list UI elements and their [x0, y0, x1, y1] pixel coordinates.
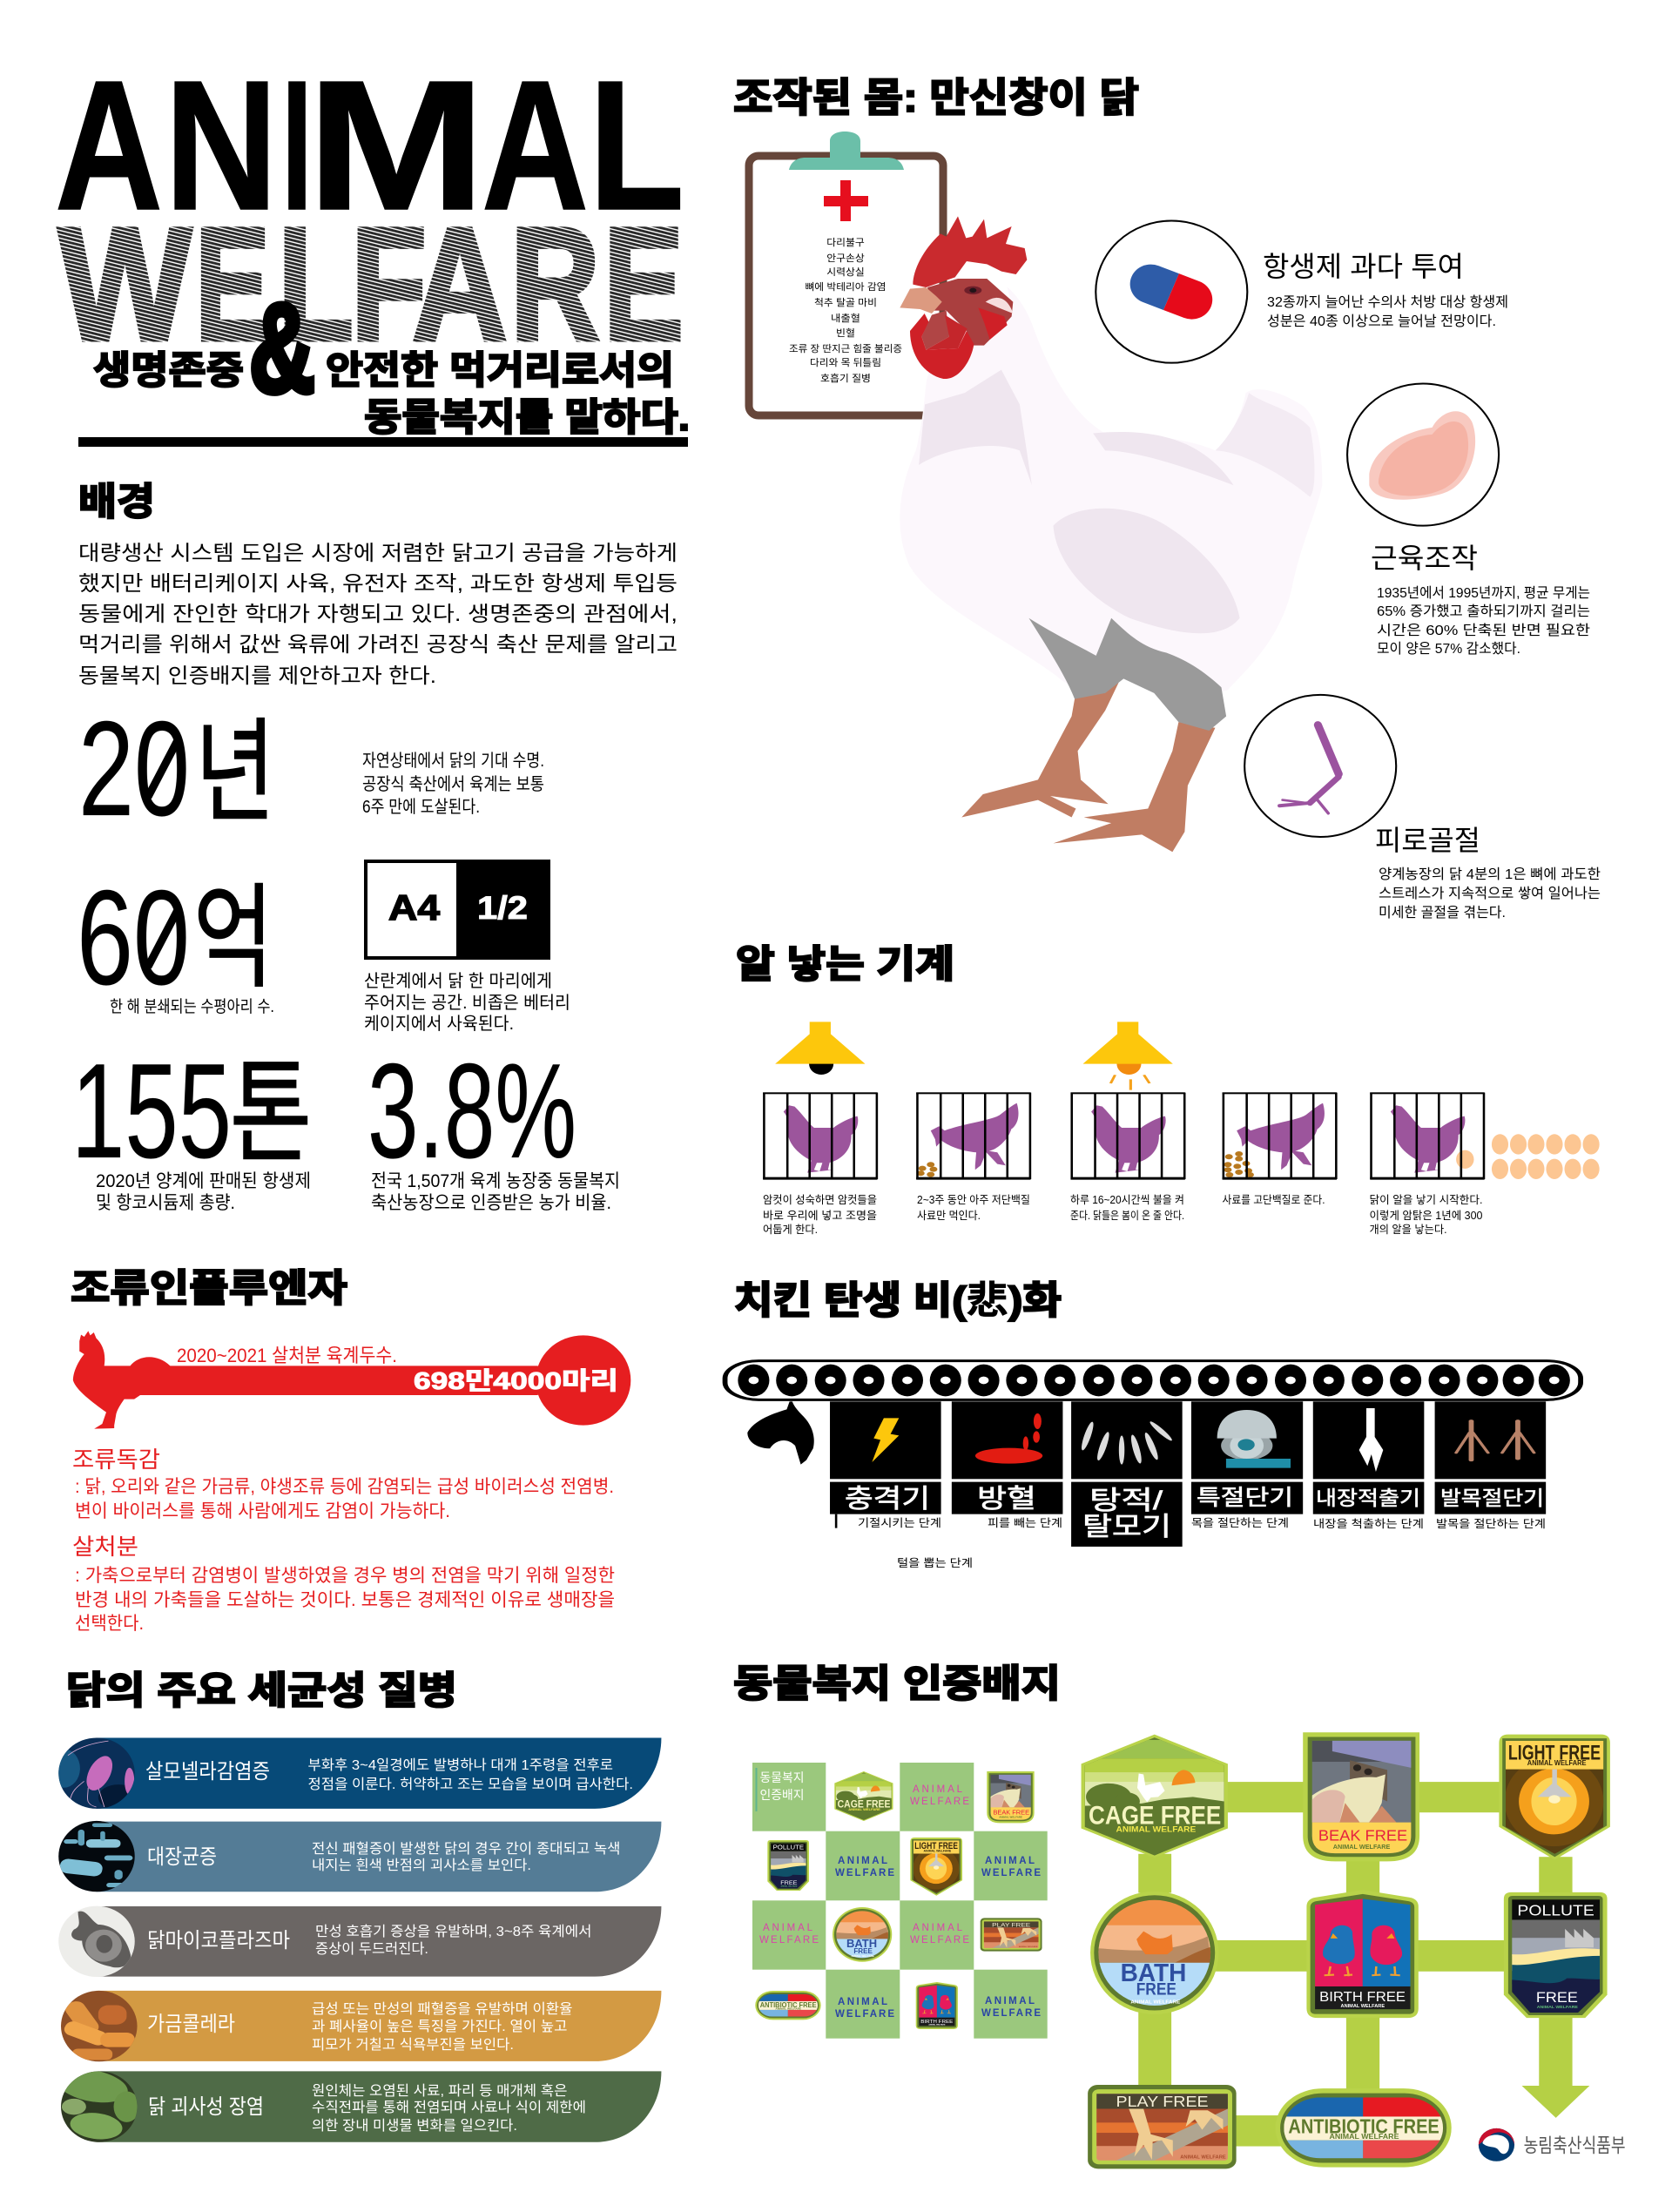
badge grid [752, 1763, 1048, 2039]
badge: bath free: FREE [1136, 1980, 1176, 1999]
cage 1 [763, 1092, 878, 1180]
arrow [1521, 2017, 1589, 2118]
mini badge: birth free [916, 1982, 958, 2029]
badge: beak free [1303, 1732, 1419, 1861]
disease 1: salmonella: 살모넬라감염증 [145, 1760, 270, 1784]
stat: A4 half space: A4 [388, 887, 440, 927]
pink wordmarks: ANIMAL [913, 1784, 963, 1795]
blue wordmarks: WELFARE [981, 2008, 1041, 2019]
badge: light free: LIGHT FREE [1508, 1741, 1601, 1764]
heading: processing: 치킨 탄생 비( 悲)화 [734, 1279, 1062, 1322]
title: WELFARE hatched: F [351, 195, 427, 374]
badge: pollute free: POLLUTE [1517, 1903, 1594, 1919]
panel: chicken processing [725, 1279, 1581, 1569]
station label 5: 내장을 척출하는 단계 [1313, 1518, 1424, 1530]
disease 2: colibacillosis: 대장균증 [147, 1845, 217, 1869]
badge: cage free: ANIMAL WELFARE [1116, 1825, 1197, 1834]
disease 4: fowl cholera [147, 2001, 573, 2053]
rooster head [900, 216, 1027, 379]
heading: avian influenza: 조류인플루엔자 [71, 1267, 347, 1310]
title: WELFARE hatched: R [510, 195, 600, 374]
station label 2: 방혈 [977, 1485, 1036, 1514]
stat: 3.8 percent: 축산농장으로 인증받은 농가 비율. [371, 1193, 611, 1213]
caption: step 3: 준다. 닭들은 봄이 온 줄 안다. [1070, 1210, 1184, 1222]
stat: 6 billion: 억 [193, 874, 273, 1001]
disease 4: fowl cholera: 급성 또는 만성의 패혈증을 유발하며 이환율 [312, 2001, 573, 2017]
grid caption: 동물복지 [759, 1770, 805, 1784]
caption: step 5: 닭이 알을 낳기 시작한다. [1369, 1194, 1482, 1206]
panel: manipulated body [733, 75, 1601, 921]
definition: culling: 선택한다. [75, 1614, 144, 1634]
subtitle: 동물복지를 말하다. [364, 396, 690, 439]
badge: antibiotic free: ANTIBIOTIC FREE [1288, 2116, 1439, 2138]
stat: 155 tons: 톤 [230, 1049, 312, 1177]
subtitle: 안전한 먹거리로서의 [326, 349, 674, 392]
title block [55, 42, 690, 447]
disease 1: salmonella: 부화후 3~4일경에도 발병하나 대개 1주령을 전후로 [308, 1757, 613, 1773]
caption: step 4: 사료를 고단백질로 준다. [1223, 1194, 1325, 1206]
badge: light free: ANIMAL WELFARE [1527, 1759, 1587, 1767]
heading: egg machine: 알 낳는 기계 [736, 943, 954, 986]
title: WELFARE hatched: E [603, 195, 684, 374]
symptoms list: 다리불구 [826, 237, 865, 248]
stat: A4 half space: 주어지는 공간. 비좁은 베터리 [364, 993, 570, 1013]
title: WELFARE hatched: L [278, 195, 354, 374]
definition: bird flu: : 닭, 오리와 같은 가금류, 야생조류 등에 감염되는 급성 바이러스성 전염병. [75, 1477, 614, 1497]
symptoms list: 뼈에 박테리아 감염 [805, 281, 887, 293]
disease bands and photos [48, 1737, 661, 2144]
pink wordmarks [759, 1784, 969, 1946]
photo: necrotic enteritis [61, 2071, 138, 2142]
station label 2: 피를 빼는 단계 [988, 1517, 1062, 1529]
badge: bath free: BATH [1121, 1959, 1186, 1986]
badge: beak free: ANIMAL WELFARE [1333, 1844, 1390, 1851]
stat: 20 years: 공장식 축산에서 육계는 보통 [362, 774, 544, 794]
title: WELFARE hatched: W [58, 195, 192, 374]
blue wordmarks: ANIMAL [838, 1856, 887, 1866]
station label 4: 목을 절단하는 단계 [1191, 1517, 1289, 1529]
station label 3: 탕적/ [1089, 1487, 1163, 1515]
disease 5: necrotic enteritis: 수직전파를 통해 전염되며 사료나 식이 제한에 [312, 2100, 586, 2115]
conveyor belt [725, 1361, 1581, 1399]
background paragraph: 동물복지 인증배지를 제안하고자 한다. [78, 664, 436, 688]
disease 1: salmonella: 정점을 이룬다. 허약하고 조는 모습을 보이며 급사한다. [308, 1777, 633, 1792]
badge: pollute free: ANIMAL WELFARE [1537, 2006, 1578, 2010]
pink wordmarks: ANIMAL [913, 1923, 963, 1933]
icon: chicken feet [1456, 1421, 1534, 1460]
caption: step 1 [763, 1194, 877, 1236]
title: ANIMAL [55, 42, 684, 248]
processing line illustration [725, 1361, 1581, 1547]
symptoms list: 다리와 목 뒤틀림 [810, 357, 881, 368]
stat: A4 half space: 1/2 [477, 890, 528, 926]
pink wordmarks: WELFARE [910, 1935, 969, 1946]
bar caption: 2020~2021 살처분 육계두수. [177, 1345, 397, 1366]
badge: birth free: ANIMAL WELFARE [1341, 2004, 1385, 2009]
mini badge: bath free [833, 1907, 892, 1962]
title: WELFARE hatched: E [195, 195, 270, 374]
station label 6: 발목절단기 [1440, 1487, 1544, 1509]
cage 5 [1370, 1092, 1485, 1180]
pink wordmarks: WELFARE [759, 1935, 819, 1946]
title: WELFARE hatched: A [412, 195, 508, 374]
subtitle [93, 349, 690, 439]
badge: antibiotic free: ANIMAL WELFARE [1330, 2133, 1399, 2141]
background paragraph: 동물에게 잔인한 학대가 자행되고 있다. 생명존중의 관점에서, [78, 603, 678, 626]
stat: A4 half space [364, 860, 570, 1034]
caption: step 2: 사료만 먹인다. [917, 1210, 981, 1222]
icon: hanging chicken [747, 1401, 814, 1465]
symptoms list [789, 237, 902, 384]
subtitle: 생명존중 [93, 349, 244, 392]
disease 5: necrotic enteritis: 원인체는 오염된 사료, 파리 등 매개체 혹은 [312, 2083, 568, 2099]
stat: 155 tons: 및 항코시듐제 총량. [96, 1193, 235, 1213]
disease 2: colibacillosis: 내지는 흰색 반점의 괴사소를 보인다. [312, 1858, 531, 1873]
mini badge: cage free [834, 1771, 893, 1821]
grid cells [752, 1763, 1048, 2039]
badge: beak free: BEAK FREE [1318, 1828, 1407, 1844]
disease 4: fowl cholera: 과 폐사율이 높은 특징을 가진다. 열이 높고 [312, 2019, 568, 2034]
grid caption [756, 1768, 805, 1811]
station label 5 [1313, 1487, 1424, 1530]
photo: E. coli [56, 1820, 137, 1894]
caption: step 3 [1070, 1194, 1184, 1222]
station label 1 [845, 1485, 941, 1529]
stat: 155 tons: 2020년 양계에 판매된 항생제 [96, 1171, 311, 1191]
caption: step 1: 바로 우리에 넣고 조명을 [763, 1210, 877, 1222]
symptoms list: 조류 장 딴지근 힘줄 불리증 [789, 343, 902, 354]
caption: step 1: 암컷이 성숙하면 암컷들을 [763, 1194, 877, 1206]
panel: welfare certification badges [733, 1662, 1626, 2168]
title: ANIMAL: N [165, 42, 278, 248]
stat: 155 tons: 155 [71, 1035, 232, 1186]
definition: bird flu: 조류독감 [72, 1447, 160, 1473]
pink wordmarks: ANIMAL [763, 1923, 813, 1933]
blue wordmarks: WELFARE [835, 2009, 894, 2020]
cage 4 [1223, 1092, 1337, 1180]
stat: A4 half space: 케이지에서 사육된다. [364, 1014, 514, 1034]
heading: background: 배경 [78, 481, 155, 523]
symptoms list: 안구손상 [826, 253, 865, 264]
definition: culling: 반경 내의 가축들을 도살하는 것이다. 보통은 경제적인 이유로 생매장을 [75, 1590, 615, 1610]
callout: muscle manipulation: 1935년에서 1995년까지, 평균 무게는 [1377, 585, 1590, 601]
callout: muscle manipulation [1371, 543, 1590, 657]
badge: birth free [1306, 1890, 1419, 2018]
icon: blood [975, 1413, 1042, 1464]
disease 2: colibacillosis [147, 1841, 620, 1873]
ampersand: & [249, 277, 315, 419]
icon: muscle [1347, 384, 1499, 526]
symptoms list: 척추 탈골 마비 [814, 297, 877, 308]
icon: lit lamp [1082, 1022, 1173, 1090]
stat: A4 half space: 산란계에서 닭 한 마리에게 [364, 971, 552, 991]
title: ANIMAL: I [281, 42, 313, 248]
logo: ministry [1479, 2128, 1626, 2161]
heading: badges: 동물복지 인증배지 [733, 1662, 1061, 1705]
connector paths [1138, 1782, 1573, 2147]
station label 3 [897, 1487, 1171, 1569]
station label 6 [1436, 1487, 1546, 1530]
definition: bird flu [72, 1447, 614, 1521]
cage 3 [1070, 1092, 1185, 1180]
station label 5: 내장적출기 [1316, 1487, 1420, 1509]
disease 1: salmonella [145, 1757, 633, 1792]
callout: fatigue fracture: 양계농장의 닭 4분의 1은 뼈에 과도한 [1379, 867, 1601, 882]
blue wordmarks: ANIMAL [985, 1856, 1035, 1866]
icon: eviscerator [1359, 1408, 1383, 1472]
pink wordmarks: WELFARE [910, 1797, 969, 1807]
stat: 6 billion: 한 해 분쇄되는 수평아리 수. [110, 997, 274, 1016]
icon: antibiotic pill [1096, 221, 1247, 363]
stat: 20 years: 년 [195, 709, 275, 836]
symptoms list: 호흡기 질병 [820, 372, 871, 384]
egg machine illustration [763, 1022, 1600, 1180]
blue wordmarks: ANIMAL [838, 1997, 887, 2007]
badge flow chart [1082, 1732, 1626, 2168]
stat: 20 years: 20 [78, 693, 190, 844]
illustration: rooster [900, 216, 1322, 852]
caption: step 2 [917, 1194, 1030, 1222]
rooster body [900, 270, 1322, 852]
stat: 20 years [78, 693, 544, 844]
caption: step 5: 이렇게 암탉은 1년에 300 [1369, 1209, 1483, 1222]
disease 4: fowl cholera: 피모가 거칠고 식욕부진을 보인다. [312, 2037, 514, 2053]
disease 2: colibacillosis: 전신 패혈증이 발생한 닭의 경우 간이 종대되고 녹색 [312, 1841, 620, 1857]
station panels [830, 1401, 1546, 1547]
symptoms list: 빈혈 [836, 327, 855, 339]
title: ANIMAL: L [589, 42, 684, 248]
station label 6: 발목을 절단하는 단계 [1436, 1518, 1546, 1530]
badge: light free [1499, 1735, 1610, 1860]
panel: background [78, 481, 678, 688]
icon: clipboard [749, 132, 943, 415]
definition: culling: 살처분 [72, 1534, 138, 1560]
eggs [1492, 1134, 1600, 1179]
icon: feathers [1079, 1420, 1175, 1465]
background paragraph: 대량생산 시스템 도입은 시장에 저렴한 닭고기 공급을 가능하게 [78, 542, 678, 565]
stat: 6 billion: 60 [77, 862, 190, 1013]
icon: rooster thermometer bar [73, 1331, 630, 1429]
bar value: 698만4000마리 [414, 1367, 618, 1394]
symptoms list: 내출혈 [831, 312, 860, 324]
callout: fatigue fracture: 피로골절 [1375, 825, 1480, 856]
caption: step 3: 하루 16~20시간씩 불을 켜 [1070, 1194, 1184, 1206]
badge: antibiotic free [1276, 2088, 1452, 2168]
badge: cage free: CAGE FREE [1089, 1800, 1221, 1830]
disease 3: mycoplasma [147, 1924, 592, 1957]
stat: 20 years: 자연상태에서 닭의 기대 수명. [362, 751, 544, 771]
mini badge: pollute free [767, 1840, 809, 1891]
photo: salmonella [58, 1738, 135, 1809]
title: ANIMAL: A [55, 42, 163, 248]
callout: antibiotic overuse [1263, 251, 1508, 329]
title: WELFARE hatched [58, 195, 684, 374]
blue wordmarks: ANIMAL [985, 1996, 1035, 2006]
blue wordmarks [835, 1856, 1041, 2020]
callout: muscle manipulation: 65% 증가했고 출하되기까지 걸리는 [1377, 604, 1590, 619]
caption: step 2: 2~3주 동안 아주 저단백질 [917, 1194, 1030, 1206]
stat: 3.8 percent: 전국 1,507개 육계 농장중 동물복지 [371, 1171, 620, 1191]
icon: neck cutter [1217, 1410, 1291, 1468]
mini badge: antibiotic free [755, 1991, 821, 2020]
title: ANIMAL: M [307, 42, 486, 248]
background paragraph: 했지만 배터리케이지 사육, 유전자 조작, 과도한 항생제 투입등 [78, 572, 678, 596]
badge: cage free [1082, 1735, 1228, 1858]
heading: diseases: 닭의 주요 세균성 질병 [66, 1669, 457, 1712]
station label 4 [1191, 1486, 1293, 1529]
badge: play free: ANIMAL WELFARE [1180, 2155, 1226, 2160]
station label 2 [977, 1485, 1062, 1529]
mini badge: light free [910, 1838, 962, 1896]
photo: fowl cholera [61, 1991, 138, 2062]
blue wordmarks: WELFARE [981, 1868, 1041, 1878]
callout: antibiotic overuse: 항생제 과다 투여 [1263, 251, 1464, 282]
background paragraph: 먹거리를 위해서 값싼 육류에 가려진 공장식 축산 문제를 알리고 [78, 633, 678, 657]
badge: play free: PLAY FREE [1116, 2094, 1209, 2111]
caption: step 1: 어둡게 한다. [763, 1224, 818, 1236]
cage 2 [916, 1092, 1031, 1180]
mini badge: play free [981, 1918, 1042, 1952]
callout: fatigue fracture: 미세한 골절을 겪는다. [1379, 905, 1506, 921]
photo: mycoplasma [58, 1905, 135, 1977]
grid caption: 인증배지 [759, 1788, 805, 1802]
badge: pollute free [1504, 1892, 1608, 2018]
panel: bacterial diseases [48, 1669, 661, 2144]
definition: culling [72, 1534, 615, 1634]
station label 3: 탈모기 [1082, 1513, 1171, 1541]
icon: bone [1244, 695, 1396, 837]
stat: 20 years: 6주 만에 도살된다. [362, 797, 480, 817]
badge: birth free: BIRTH FREE [1319, 1989, 1406, 2005]
caption: step 5: 개의 알을 낳는다. [1369, 1224, 1447, 1236]
callout: antibiotic overuse: 32종까지 늘어난 수의사 처방 대상 항생제 [1267, 294, 1508, 310]
disease 3: mycoplasma: 닭마이코플라즈마 [147, 1929, 290, 1952]
title underline [78, 437, 688, 447]
badge: play free [1088, 2085, 1237, 2168]
definition: culling: : 가축으로부터 감염병이 발생하였을 경우 병의 전염을 막기 위해 일정한 [75, 1566, 615, 1586]
disease 5: necrotic enteritis: 닭 괴사성 장염 [148, 2095, 264, 2119]
badge: bath free [1090, 1892, 1218, 2014]
station label 1: 기절시키는 단계 [858, 1517, 941, 1529]
panel: statistics [71, 693, 620, 1213]
callout: muscle manipulation: 모이 양은 57% 감소했다. [1377, 641, 1520, 657]
heading: manipulated body: 조작된 몸: 만신창이 닭 [733, 75, 1139, 120]
callout: muscle manipulation: 근육조작 [1371, 543, 1478, 574]
disease 3: mycoplasma: 만성 호흡기 증상을 유발하며, 3~8주 육계에서 [315, 1924, 592, 1939]
station label 3: 털을 뽑는 단계 [897, 1557, 973, 1569]
disease 4: fowl cholera: 가금콜레라 [147, 2013, 235, 2036]
callout: fatigue fracture [1375, 825, 1601, 921]
icon: lightning [872, 1418, 899, 1462]
disease 5: necrotic enteritis [148, 2083, 586, 2134]
mini badge: beak free [987, 1771, 1035, 1823]
definition: bird flu: 변이 바이러스를 통해 사람에게도 감염이 가능하다. [75, 1501, 450, 1521]
disease 3: mycoplasma: 증상이 두드러진다. [315, 1941, 428, 1957]
badge: pollute free: FREE [1536, 1989, 1578, 2006]
symptoms list: 시력상실 [826, 266, 865, 278]
disease 5: necrotic enteritis: 의한 장내 미생물 변화를 일으킨다. [312, 2118, 517, 2134]
panel: avian influenza [71, 1267, 630, 1634]
blue wordmarks: WELFARE [835, 1868, 894, 1878]
caption: step 5 [1369, 1194, 1483, 1236]
background paragraph [78, 542, 678, 688]
callout: antibiotic overuse: 성분은 40종 이상으로 늘어날 전망이다. [1267, 314, 1496, 329]
badge: bath free: ANIMAL WELFARE [1130, 2000, 1180, 2005]
title: ANIMAL: A [482, 42, 589, 248]
station label 1: 충격기 [845, 1485, 930, 1514]
stat: 3.8 percent: 3.8% [367, 1035, 576, 1186]
callout: muscle manipulation: 시간은 60% 단축된 반면 필요한 [1377, 623, 1590, 638]
panel: egg laying machine [736, 943, 1600, 1236]
icon: dark lamp [775, 1022, 865, 1075]
station label 4: 특절단기 [1197, 1486, 1293, 1510]
callout: fatigue fracture: 스트레스가 지속적으로 쌓여 일어나는 [1379, 886, 1601, 901]
